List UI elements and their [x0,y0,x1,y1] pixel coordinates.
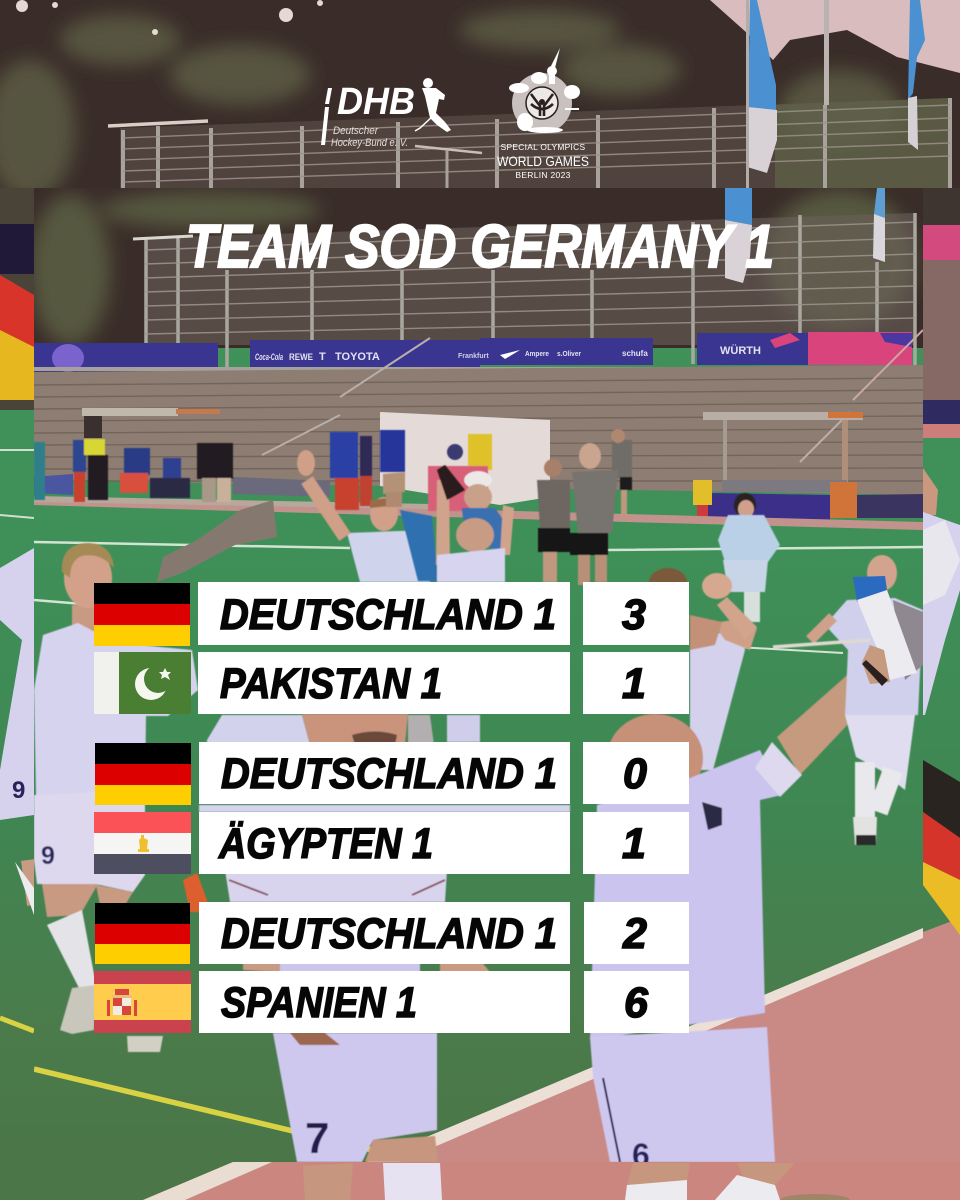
row 5: Deutschland score: 2 [622,910,647,958]
stadium fence [133,188,915,370]
outer players: 9 [12,777,25,804]
glove and water bottle [853,576,923,686]
logo: Special Olympics World Games [497,48,589,180]
flag: Egypt [94,812,191,874]
sponsor banners: REWE [289,352,313,362]
row 1: Deutschland score [198,582,689,645]
sponsor banners: T [319,351,326,363]
player number 9 [34,543,198,1052]
row 6: Spain score: 6 [624,979,649,1027]
logo: DHB [321,78,451,149]
track strip and field lines [34,496,923,1168]
sponsor banners: schufa [622,349,648,358]
row 1: Deutschland score: 3 [622,591,646,639]
players behind with cap and blue shirt [383,465,514,582]
row 2: Pakistan score: 1 [622,660,646,708]
sponsor banners: Coca-Cola [255,352,283,362]
row 5: Deutschland score [199,902,689,964]
flag: Germany 3 [95,903,190,964]
player number 9: 9 [41,842,55,870]
sponsor banners: Frankfurt [458,353,489,360]
sponsor banners: Ampere [525,351,549,358]
player legs below the photo panel [303,1163,850,1200]
logo: DHB: Hockey-Bund e. V. [331,137,408,149]
row 4: Egypt score: 1 [622,820,646,868]
player number 6 with water bottle: 6 [632,1137,650,1173]
outer fence [108,98,950,228]
row 6: Spain score [199,971,689,1033]
flag: Germany 1 [94,583,190,646]
sponsor banners [34,332,912,372]
trees behind stadium [30,188,923,348]
goalkeeper running [718,493,780,622]
row 4: Egypt score [199,812,689,874]
row 3: Deutschland score: DEUTSCHLAND 1 [221,750,557,798]
smiling player with raised arm [297,450,430,582]
player number 7: 7 [305,1114,329,1163]
sponsor banners: s.Oliver [557,351,581,358]
flag: Spain [94,971,191,1033]
row 2: Pakistan score: PAKISTAN 1 [220,660,442,708]
hockey bag [157,500,277,582]
logo: DHB: Deutscher [333,125,379,137]
row 1: Deutschland score: DEUTSCHLAND 1 [220,591,556,639]
player number 7 [183,714,570,1163]
player number 8 [773,555,923,845]
stands [34,330,923,505]
inner photo panel [30,188,923,1173]
row 3: Deutschland score [199,742,689,804]
team shelters [34,408,923,520]
logo: Special Olympics World Games: WORLD GAMES [497,153,589,169]
logo: Special Olympics World Games: BERLIN 2023 [515,170,571,180]
row 2: Pakistan score [198,652,689,714]
sponsor banners: WÜRTH [720,344,761,357]
flag: Pakistan [94,652,191,714]
logo: Special Olympics World Games: SPECIAL OLYMPICS [501,142,586,152]
outer german flag stripes [0,275,34,347]
row 6: Spain score: SPANIEN 1 [221,979,417,1027]
flag: Germany 2 [95,743,191,805]
sponsor banners: TOYOTA [335,351,380,363]
officials walking behind [537,429,632,585]
background people [34,430,492,511]
row 4: Egypt score: ÄGYPTEN 1 [218,820,433,868]
logo: DHB: DHB [337,81,415,123]
outer players [0,468,960,915]
title: TEAM SOD GERMANY 1 [186,213,774,280]
row 5: Deutschland score: DEUTSCHLAND 1 [221,910,557,958]
outer flags [746,0,925,188]
player number 6 with water bottle [589,568,848,1162]
row 3: Deutschland score: 0 [623,750,647,798]
